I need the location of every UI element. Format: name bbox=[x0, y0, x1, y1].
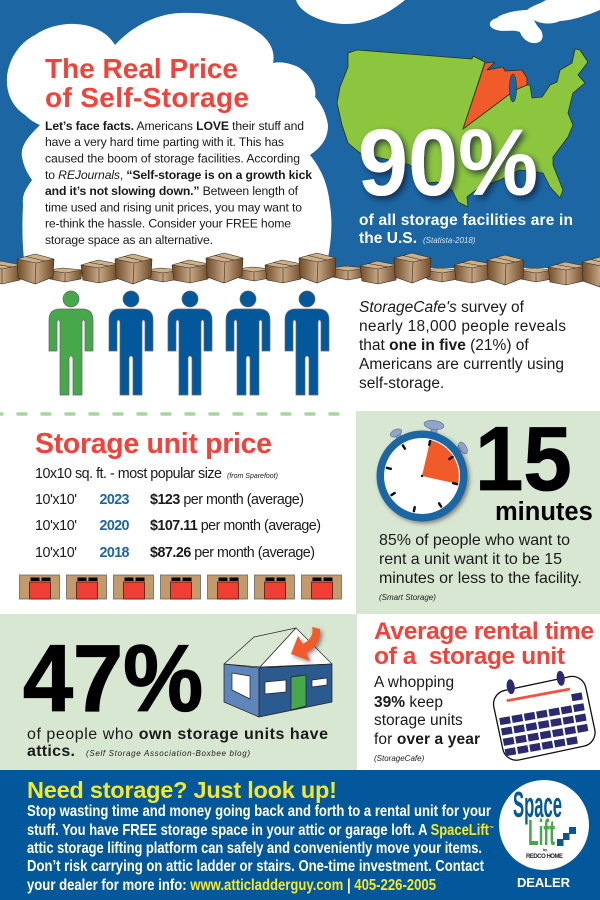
icon: green person bbox=[49, 291, 93, 395]
text: 47 percent description: of people who own storage units have bbox=[27, 726, 328, 743]
text: StorageCafe survey bbox=[359, 299, 566, 392]
text: 15 minutes description bbox=[379, 532, 582, 602]
icon: blue person 5 bbox=[285, 291, 329, 395]
heading: average rental time: of a storage unit bbox=[374, 643, 565, 670]
text: dealer: DEALER bbox=[517, 875, 571, 890]
panel: 47 percent background bbox=[0, 614, 357, 770]
text: footer call to action: ™ bbox=[489, 825, 494, 832]
title: The Real Price bbox=[45, 53, 238, 84]
intro text block: time used and rising unit prices, you may want to bbox=[45, 200, 302, 214]
text: StorageCafe survey: StorageCafe's survey of bbox=[359, 299, 525, 316]
text: most popular size: 10x10 sq. ft. - most popular size bbox=[35, 466, 222, 482]
heading: need storage: Need storage? Just look up! bbox=[27, 777, 337, 803]
row: 2020: 2020 bbox=[100, 518, 130, 534]
cloud: top right bbox=[490, 0, 600, 43]
intro text block: have a very hard time parting with it. This has bbox=[45, 135, 284, 149]
text: 39 percent keep units: A whopping bbox=[374, 674, 454, 691]
heading: average rental time: Average rental time bbox=[374, 618, 594, 645]
text: 90 percent description bbox=[359, 212, 573, 247]
text: footer call to action: attic storage lifting platform can safely and conveniently move your items. bbox=[27, 840, 482, 857]
icon: blue person 3 bbox=[168, 291, 212, 395]
row: 2023: $123 per month (average) bbox=[150, 492, 304, 508]
arrow: pointing to attic bbox=[291, 627, 320, 661]
icon: blue person 4 bbox=[226, 291, 270, 395]
text: 39 percent keep units: for over a year bbox=[374, 731, 480, 748]
big stat: 47%: 47% bbox=[23, 625, 203, 731]
map: United States with orange wedge bbox=[337, 49, 588, 207]
row: 2018 bbox=[35, 545, 315, 561]
text: 15 minutes description: rent a unit want it to be 15 bbox=[379, 551, 562, 568]
table: price by year bbox=[35, 492, 321, 561]
text: 15 minutes description: (Smart Storage) bbox=[379, 593, 436, 602]
text: 15 minutes description: minutes or less to the facility. bbox=[379, 570, 582, 587]
text: 47 percent description: attics. bbox=[27, 743, 75, 760]
row: 2018: 10'x10' bbox=[35, 545, 77, 561]
heading: average rental time bbox=[374, 618, 594, 670]
text: 39 percent keep units bbox=[374, 674, 480, 763]
text: 15 minutes description: 85% of people who want to bbox=[379, 532, 570, 549]
panel: 15 minutes background bbox=[356, 411, 600, 614]
text: StorageCafe survey: that one in five (21%) of bbox=[359, 337, 529, 354]
intro text block bbox=[45, 119, 312, 247]
panel: footer background bbox=[0, 770, 600, 900]
intro text block: caused the boom of storage facilities. According bbox=[45, 152, 300, 166]
row: 2023: 2023 bbox=[100, 492, 130, 508]
row: 2023: 10'x10' bbox=[35, 492, 77, 508]
text: 90 percent description: the U.S. bbox=[359, 230, 417, 247]
icon: stopwatch bbox=[376, 419, 469, 522]
icon: house with attic bbox=[224, 627, 332, 717]
text: most popular size: (from Sparefoot) bbox=[227, 473, 278, 480]
intro text block: to REJournals, “Self-storage is on a growth kick bbox=[45, 168, 312, 182]
row: 2020: $107.11 per month (average) bbox=[150, 518, 321, 534]
text: footer call to action: your dealer for more info: www.atticladderguy.com | 405-226-2005 bbox=[27, 877, 436, 894]
row: 2018: 2018 bbox=[100, 545, 130, 561]
icon: calendar bbox=[491, 670, 598, 763]
intro text block: storage space as an alternative. bbox=[45, 233, 213, 247]
text: footer call to action: stuff. You have FREE storage space in your attic or garage loft. A SpaceLift bbox=[27, 822, 505, 839]
logo: SpaceLift by Redco Home: REDCO HOME bbox=[526, 854, 563, 860]
intro text block: Let’s face facts. Americans LOVE their stuff and bbox=[45, 119, 304, 133]
row: 2018: $87.26 per month (average) bbox=[150, 545, 315, 561]
logo: SpaceLift by Redco Home: by bbox=[543, 848, 547, 852]
intro text block: and it’s not slowing down.” Between length of bbox=[45, 184, 299, 198]
title bbox=[45, 53, 249, 113]
row: 2023 bbox=[35, 492, 304, 508]
text: 39 percent keep units: 39% keep bbox=[374, 694, 443, 711]
icons: storage unit doors bbox=[20, 575, 342, 599]
text: 39 percent keep units: storage units bbox=[374, 712, 463, 729]
text: 39 percent keep units: (StorageCafe) bbox=[374, 754, 425, 763]
text: footer call to action: Don’t risk carrying on attic ladder or stairs. One-time investment. Contact bbox=[27, 858, 484, 875]
text: minutes: minutes bbox=[495, 498, 593, 526]
heading: storage unit price: Storage unit price bbox=[35, 428, 272, 460]
text: StorageCafe survey: self-storage. bbox=[359, 375, 444, 392]
title: of Self-Storage bbox=[45, 82, 249, 113]
row of cardboard boxes bbox=[0, 253, 600, 287]
text: footer call to action bbox=[27, 803, 494, 894]
people icons: one in five bbox=[49, 291, 329, 395]
logo: SpaceLift by Redco Home bbox=[499, 780, 589, 870]
row: 2020: 10'x10' bbox=[35, 518, 77, 534]
text: 90 percent description: (Statista-2018) bbox=[423, 236, 476, 245]
panel: blue hero background bbox=[0, 0, 600, 268]
text: StorageCafe survey: nearly 18,000 people reveals bbox=[359, 318, 566, 335]
big stat: 90%: 90% bbox=[358, 109, 538, 215]
text: StorageCafe survey: Americans are currently using bbox=[359, 356, 564, 373]
big stat: 15: 15 bbox=[475, 408, 572, 509]
icon: blue person 2 bbox=[109, 291, 153, 395]
text: 90 percent description: of all storage facilities are in bbox=[359, 212, 573, 229]
text: footer call to action: Stop wasting time and money going back and forth to a rental unit for your bbox=[27, 803, 491, 820]
row: 2020 bbox=[35, 518, 321, 534]
logo: SpaceLift by Redco Home: Lift bbox=[528, 812, 555, 853]
cloud: intro text background bbox=[7, 13, 331, 268]
cloud: top centre bbox=[296, 0, 405, 24]
intro text block: re-think the hassle. Consider your FREE home bbox=[45, 216, 291, 230]
text: 47 percent description bbox=[27, 726, 328, 760]
text: 47 percent description: (Self Storage Association-Boxbee blog) bbox=[86, 749, 250, 758]
